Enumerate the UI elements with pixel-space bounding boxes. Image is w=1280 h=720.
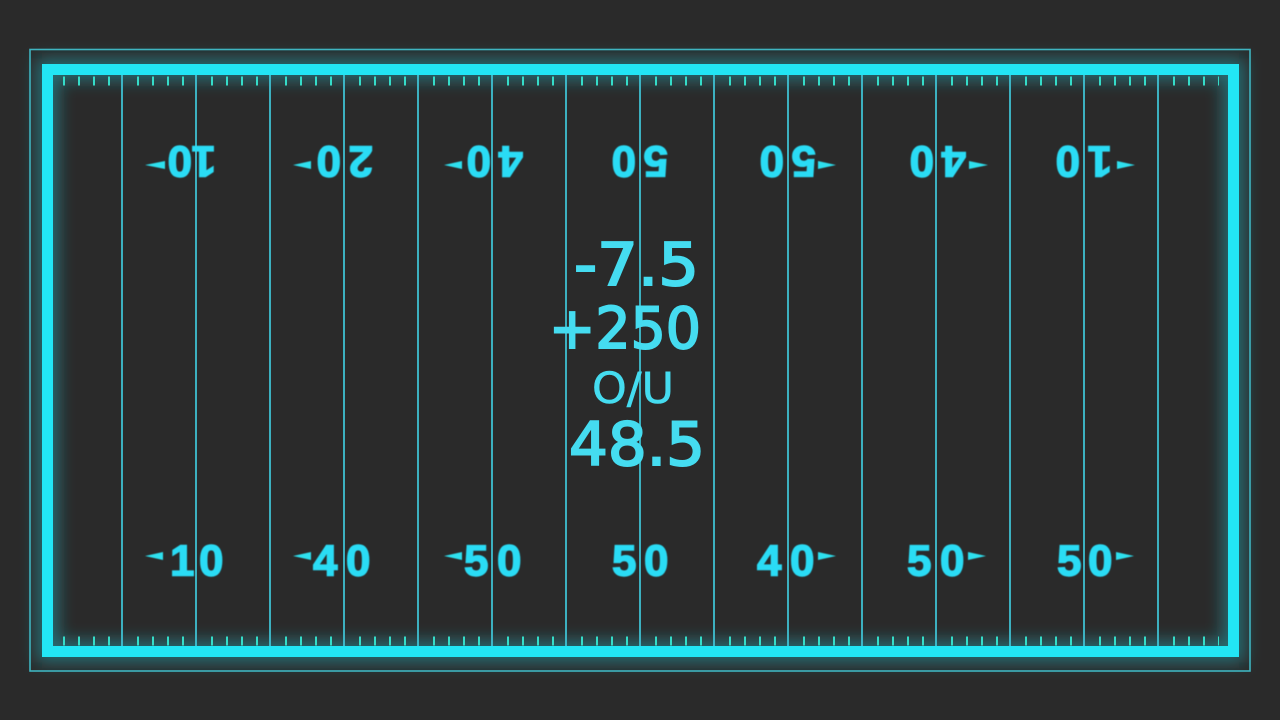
total: 48.5 xyxy=(569,410,705,480)
bottom number 10: 10 xyxy=(170,536,223,586)
top hash marks xyxy=(63,76,1219,86)
bottom number 50 far right: 50 xyxy=(1057,536,1112,586)
frame glow xyxy=(48,70,1234,652)
top row yard numbers xyxy=(145,136,1135,186)
top number 10 right: 10 xyxy=(1056,136,1112,186)
top number 10 xyxy=(145,136,216,186)
top number 50 center: 50 xyxy=(612,136,668,186)
bottom number 50 center: 50 xyxy=(612,536,668,586)
top number 10: 10 xyxy=(168,136,216,186)
top number 40: 40 xyxy=(467,136,523,186)
bottom row yard numbers xyxy=(145,536,1134,586)
bottom number 50 left: 50 xyxy=(464,536,521,586)
thick field border xyxy=(48,70,1234,652)
bottom number 40: 40 xyxy=(313,536,370,586)
bottom number 40 right: 40 xyxy=(757,536,814,586)
bottom number 10 xyxy=(145,536,223,586)
moneyline: +250 xyxy=(549,296,701,362)
over under label: O/U xyxy=(592,364,674,414)
top number 20: 20 xyxy=(317,136,373,186)
betting lines xyxy=(549,230,705,480)
bottom hash marks xyxy=(63,636,1219,646)
top number 40 right: 40 xyxy=(910,136,966,186)
top number 50 right: 50 xyxy=(760,136,816,186)
yard lines xyxy=(122,75,1158,646)
bottom number 50 right: 50 xyxy=(907,536,964,586)
spread: -7.5 xyxy=(574,230,699,299)
